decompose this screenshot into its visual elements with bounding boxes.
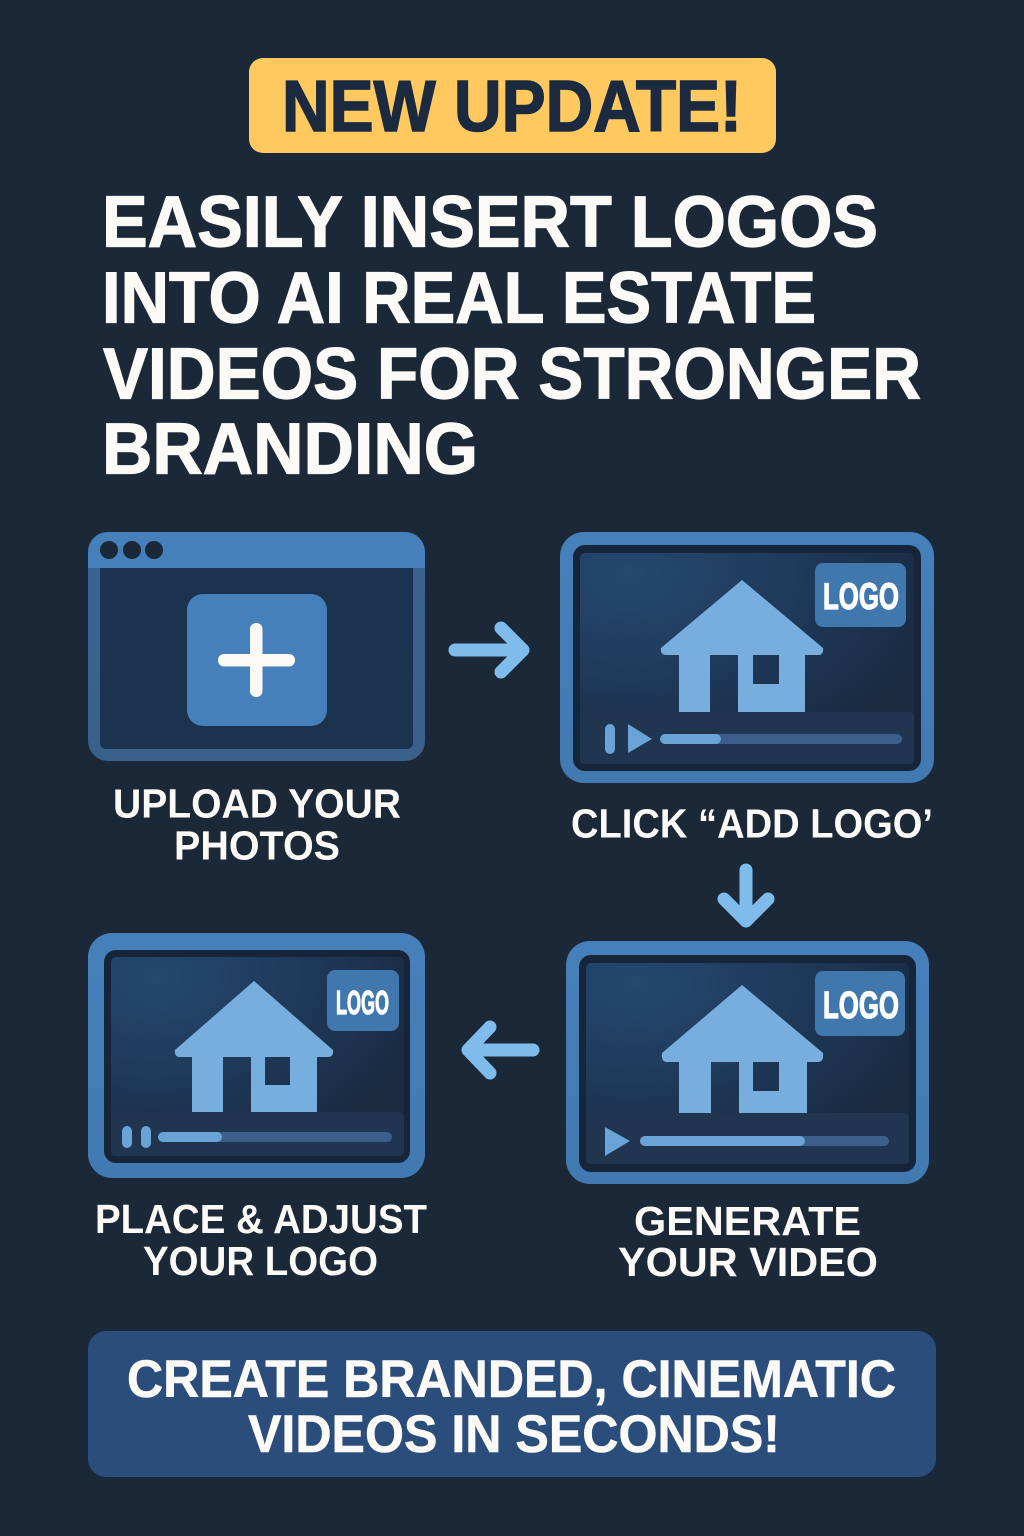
- logo badge: [815, 971, 905, 1036]
- logo badge: LOGO: [336, 984, 389, 1021]
- callout: create branded videos: CREATE BRANDED, CINEMATIC: [127, 1350, 896, 1409]
- label: place and adjust your logo: [95, 1196, 427, 1284]
- title: INTO AI REAL ESTATE: [102, 258, 816, 338]
- label: place and adjust your logo: PLACE & ADJUST: [95, 1196, 427, 1242]
- panel: upload window: [88, 532, 425, 761]
- player controls: [122, 1126, 392, 1148]
- icon: plus button: [187, 594, 327, 726]
- arrow: upload to add logo: [455, 628, 523, 672]
- label: place and adjust your logo: YOUR LOGO: [143, 1238, 378, 1284]
- icon: house: [662, 985, 823, 1113]
- badge: new update: NEW UPDATE!: [282, 67, 742, 147]
- callout: create branded videos: [88, 1331, 936, 1477]
- logo badge: LOGO: [823, 985, 899, 1027]
- label: generate your video: [618, 1198, 878, 1285]
- arrow: add logo to generate: [724, 870, 768, 921]
- label: click add logo: CLICK “ADD LOGO’: [571, 800, 933, 846]
- title: EASILY INSERT LOGOS: [102, 182, 878, 262]
- label: upload your photos: [113, 780, 401, 868]
- label: upload your photos: PHOTOS: [174, 822, 340, 868]
- panel: place logo video player: [88, 933, 425, 1178]
- icon: window dots: [100, 541, 163, 559]
- label: generate your video: YOUR VIDEO: [618, 1239, 878, 1285]
- panel: add logo video player: [560, 532, 934, 783]
- title: [102, 182, 921, 490]
- icon: house: [661, 580, 823, 712]
- player controls: [605, 724, 902, 754]
- title: BRANDING: [102, 410, 478, 490]
- title: VIDEOS FOR STRONGER: [103, 334, 921, 414]
- player controls: [605, 1127, 889, 1156]
- icon: house: [175, 981, 333, 1112]
- logo badge: LOGO: [823, 576, 899, 617]
- logo badge: [327, 970, 399, 1031]
- arrow: generate to place: [468, 1027, 533, 1073]
- label: generate your video: GENERATE: [634, 1198, 861, 1244]
- callout: create branded videos: VIDEOS IN SECONDS!: [248, 1405, 780, 1464]
- label: upload your photos: UPLOAD YOUR: [113, 780, 401, 826]
- logo badge: [815, 563, 906, 627]
- panel: generate video player: [566, 941, 929, 1184]
